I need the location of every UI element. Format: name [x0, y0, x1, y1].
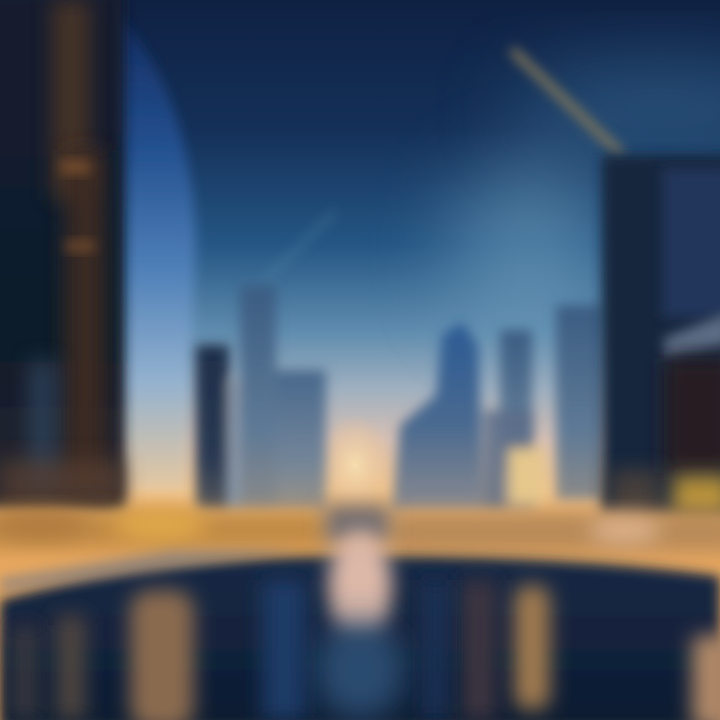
curved glass tower: [100, 0, 196, 490]
waterfront lights: [0, 505, 720, 552]
right foreground building: [602, 155, 720, 520]
water surface: [0, 550, 720, 720]
left dark tower: [0, 0, 125, 510]
water reflections: [12, 530, 720, 720]
distant crane, left cluster: [265, 212, 335, 280]
left building cluster: [196, 285, 326, 510]
tower crane, right: [512, 50, 622, 155]
centre-right building cluster: [392, 305, 604, 510]
